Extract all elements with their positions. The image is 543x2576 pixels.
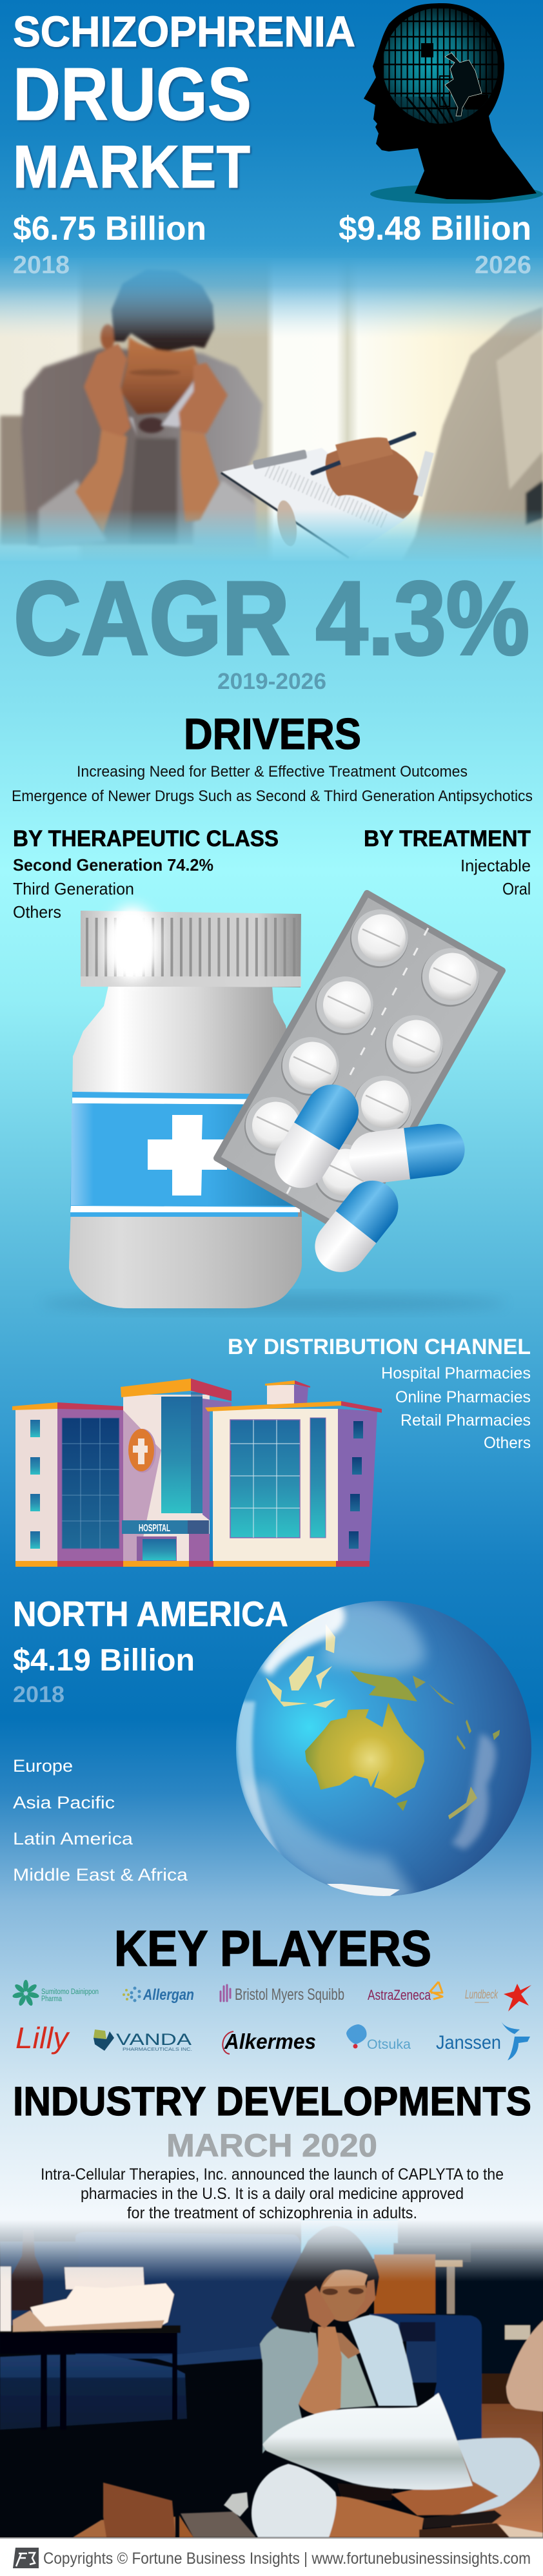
- Borneo and Sumatra: [289, 1656, 314, 1690]
- by therapeutic class: Third Generation: [13, 879, 134, 898]
- by treatment: [364, 826, 531, 898]
- sock: [424, 2510, 502, 2528]
- by distribution channel: [228, 1335, 531, 1452]
- regional stats: [13, 1594, 288, 1884]
- New Zealand: [448, 1787, 477, 1819]
- logo: Lilly: Lilly: [15, 2021, 70, 2055]
- logo: AstraZeneca: AstraZeneca: [368, 1987, 431, 2003]
- patient face: [121, 337, 198, 414]
- cap: [81, 911, 301, 987]
- patient ear: [101, 324, 115, 350]
- logo: Otsuka: [346, 2024, 411, 2052]
- regional stats: Middle East & Africa: [13, 1865, 188, 1884]
- illustration: medicine bottle: [41, 905, 506, 1312]
- top box: [267, 1385, 294, 1404]
- stat: 2018 value: $6.75 Billion: [13, 210, 206, 247]
- drivers: [12, 710, 533, 805]
- illustration: hospital building: HOSPITAL: [139, 1523, 170, 1534]
- key players heading: KEY PLAYERS: [114, 1920, 431, 1977]
- pants: [252, 2464, 337, 2537]
- logo: Lundbeck: [465, 1984, 531, 2011]
- base strip: [15, 1561, 57, 1567]
- by therapeutic class: BY THERAPEUTIC CLASS: [13, 826, 279, 851]
- regional stats: Latin America: [13, 1829, 133, 1848]
- seated figure: [445, 53, 482, 116]
- right wall: [435, 2249, 543, 2378]
- CAGR headline: 2019-2026: [217, 669, 326, 694]
- illustration: globe: [236, 1601, 531, 1901]
- industry developments: [13, 2079, 531, 2222]
- by distribution channel: Others: [484, 1434, 531, 1452]
- illustration: hospital building: [12, 1379, 382, 1567]
- regional stats: Asia Pacific: [13, 1793, 115, 1812]
- photo: woman with pillow: [0, 2220, 543, 2537]
- cross sign: [129, 1429, 156, 1473]
- regional stats: NORTH AMERICA: [13, 1594, 288, 1634]
- stat: 2018 value: [13, 210, 206, 279]
- sofa left cushions: [150, 2346, 262, 2365]
- regional stats: Europe: [13, 1756, 73, 1776]
- patient hair: [112, 269, 214, 353]
- bottle label: [70, 1092, 298, 1217]
- arm and hands: [299, 2327, 342, 2415]
- logo: Lundbeck: Lundbeck: [465, 1988, 499, 2002]
- clipboard: [221, 448, 407, 559]
- Pacific islands: [413, 1676, 500, 1750]
- highlights: [261, 1603, 345, 1676]
- title: [13, 8, 355, 200]
- logo: Allergan: [123, 1986, 194, 2004]
- industry developments: for the treatment of schizophrenia in adults.: [127, 2204, 417, 2222]
- logo: Sumitomo Dainippon Pharma: [12, 1980, 99, 2007]
- logo: Vanda Pharmaceuticals: VANDA: [116, 2031, 192, 2049]
- by distribution channel: BY DISTRIBUTION CHANNEL: [228, 1335, 531, 1359]
- Australia: [305, 1703, 424, 1798]
- blanket: [457, 2438, 540, 2513]
- regional stats: 2018: [13, 1682, 64, 1707]
- drivers: Emergence of Newer Drugs Such as Second & Third Generation Antipsychotics: [12, 788, 533, 805]
- doctor hand and pen: [274, 434, 434, 548]
- stat: 2026 value: 2026: [475, 251, 531, 279]
- doctor coat: [402, 307, 543, 561]
- bottle on table: [12, 2230, 43, 2310]
- industry developments: Intra-Cellular Therapies, Inc. announced the launch of CAPLYTA to the: [41, 2165, 504, 2184]
- logo: Vanda Pharmaceuticals: [94, 2029, 192, 2052]
- side table: [0, 2325, 181, 2333]
- hospital sign: [122, 1520, 209, 1534]
- logo: Sumitomo Dainippon Pharma: Sumitomo Dainippon: [41, 1988, 99, 1996]
- by treatment: Oral: [502, 879, 531, 898]
- stat: 2026 value: $9.48 Billion: [339, 210, 531, 247]
- cell window: [380, 8, 503, 126]
- sofa back: [75, 2232, 301, 2359]
- sofa right arm: [370, 2314, 482, 2443]
- logo: Vanda Pharmaceuticals: PHARMACEUTICALS INC.: [123, 2048, 192, 2052]
- industry developments: pharmacies in the U.S. It is a daily oral medicine approved: [81, 2185, 464, 2203]
- shirt collar: [161, 376, 200, 427]
- title: SCHIZOPHRENIA: [13, 8, 355, 56]
- left wing: [15, 1409, 57, 1562]
- tissue box: [64, 2267, 144, 2289]
- by distribution channel: Online Pharmacies: [395, 1388, 531, 1406]
- New Guinea: [350, 1671, 417, 1701]
- Tasmania: [397, 1800, 408, 1811]
- logo: Otsuka: Otsuka: [367, 2037, 411, 2052]
- by therapeutic class: Others: [13, 902, 61, 922]
- Antarctica: [327, 1884, 400, 1896]
- by treatment: BY TREATMENT: [364, 826, 531, 851]
- logo: Sumitomo Dainippon Pharma: Pharma: [41, 1995, 62, 2003]
- centre tower: [123, 1395, 210, 1562]
- orange chair: [374, 2254, 435, 2314]
- logo: Alkermes: Alkermes: [224, 2029, 316, 2053]
- drivers: DRIVERS: [184, 710, 361, 759]
- patient shirt: [21, 348, 262, 545]
- industry developments: MARCH 2020: [166, 2127, 377, 2164]
- carpet: [499, 2524, 543, 2537]
- logo mark: [13, 2548, 39, 2568]
- logo: Allergan: Allergan: [143, 1986, 194, 2004]
- regional stats: $4.19 Billion: [13, 1643, 195, 1678]
- icon: head silhouette with prison cell: [364, 3, 543, 204]
- floor: [481, 2374, 543, 2404]
- right wing: [213, 1409, 338, 1562]
- logo: Bristol Myers Squibb: [221, 1985, 344, 2004]
- drivers: Increasing Need for Better & Effective Treatment Outcomes: [77, 763, 468, 780]
- capsule: right: [346, 1121, 468, 1186]
- capsule: bottom: [304, 1170, 409, 1283]
- pillow: [262, 2393, 473, 2490]
- crumpled paper: [181, 2512, 256, 2537]
- logo: Bristol Myers Squibb: Bristol Myers Squibb: [235, 1986, 344, 2004]
- stat: 2026 value: [339, 210, 531, 279]
- photo: patient and doctor: [0, 258, 543, 564]
- by distribution channel: Hospital Pharmacies: [381, 1364, 531, 1382]
- title: MARKET: [13, 133, 250, 200]
- by therapeutic class: [13, 826, 279, 922]
- patient left arm: [75, 430, 127, 533]
- window sky: [301, 2220, 398, 2259]
- by distribution channel: Retail Pharmacies: [400, 1411, 531, 1429]
- by therapeutic class: Second Generation 74.2%: [13, 855, 213, 875]
- hair: [271, 2225, 379, 2333]
- capsule: centre: [265, 1074, 368, 1198]
- footer bar: [0, 2537, 543, 2576]
- logo: Janssen: [436, 2021, 530, 2060]
- clouds and lower haze: [322, 1601, 426, 1672]
- illustration: blister pack: [217, 893, 502, 1235]
- legs: [337, 2483, 393, 2501]
- beige sack: [506, 2320, 543, 2412]
- cardboard box: [73, 2517, 175, 2537]
- patient right arm: [181, 430, 219, 522]
- shirt: [260, 2327, 322, 2454]
- stat: 2018 value: 2018: [13, 251, 70, 279]
- face: [320, 2270, 368, 2321]
- by treatment: Injectable: [460, 856, 531, 875]
- logo: Janssen: Janssen: [436, 2032, 501, 2053]
- cross: [148, 1115, 227, 1196]
- right sleeve: [348, 2315, 417, 2406]
- title: DRUGS: [13, 52, 252, 136]
